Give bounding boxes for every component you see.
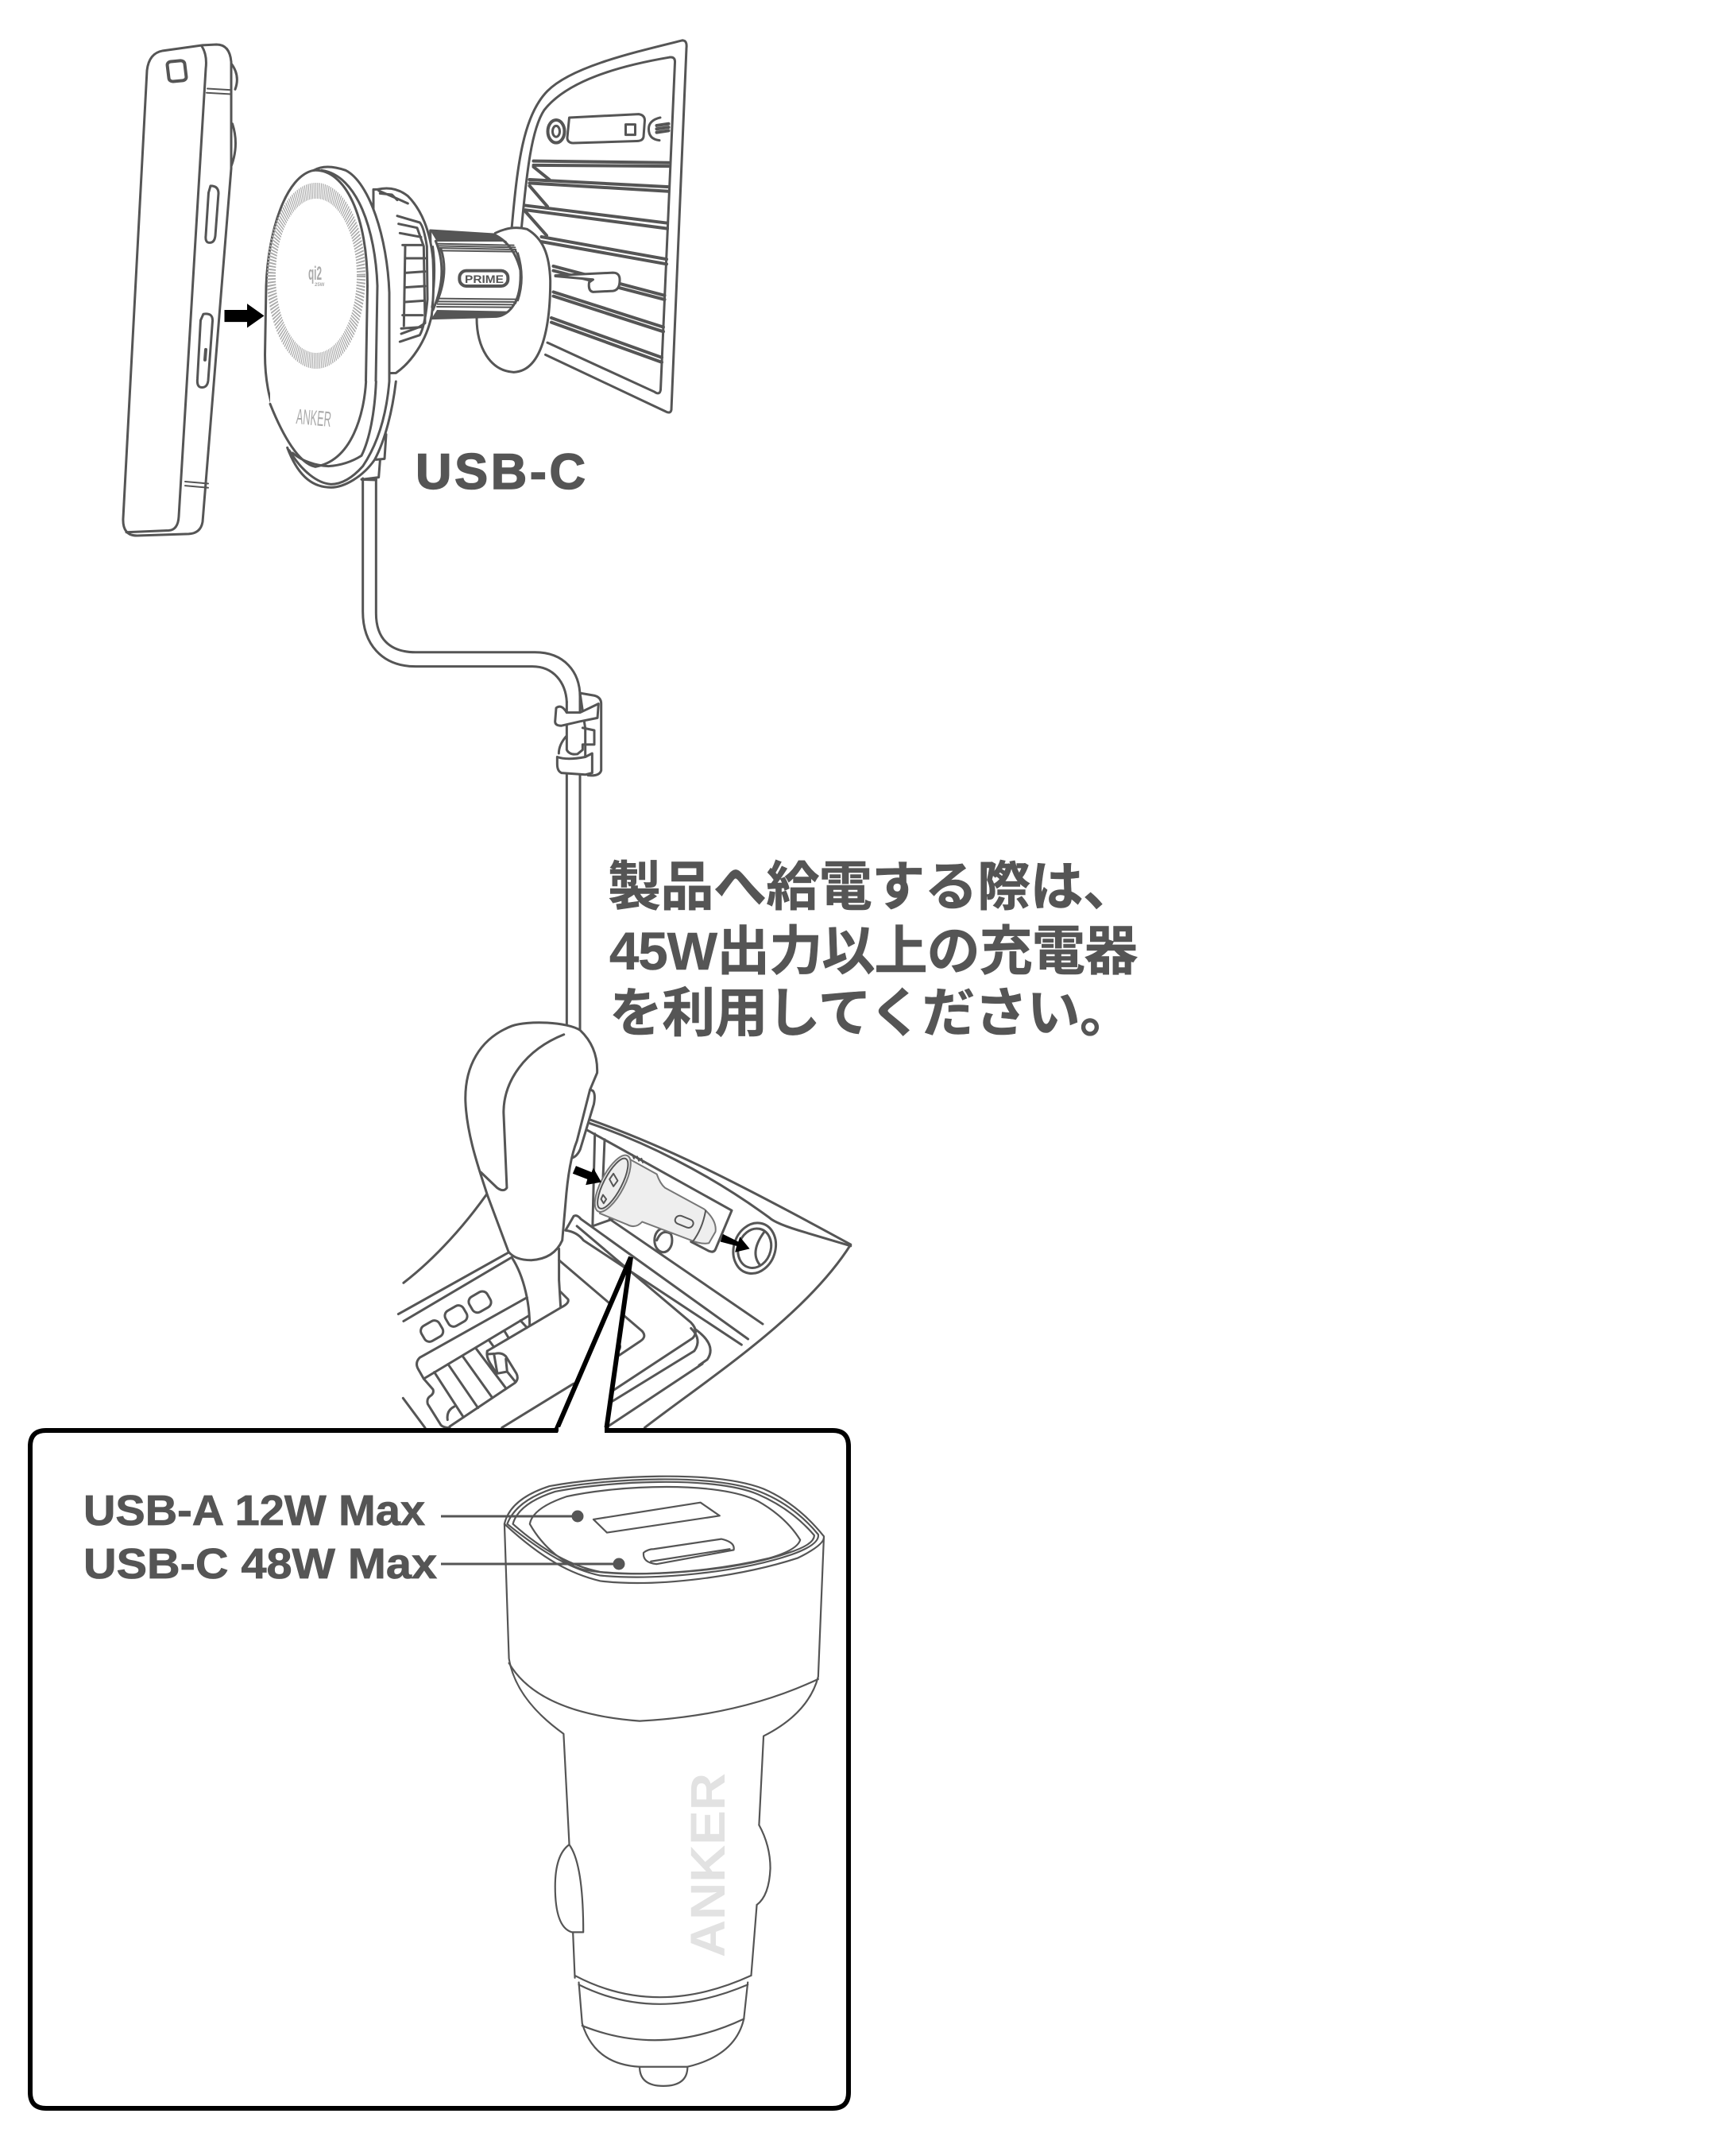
label: USB-C 48W Max: USB-C 48W Max bbox=[83, 1540, 437, 1588]
arrow: phone to charger bbox=[224, 304, 264, 328]
logo: PRIME badge text: PRIME bbox=[465, 273, 504, 285]
illustration: console control panel bbox=[403, 1289, 620, 1428]
illustration: charger base and neck bbox=[270, 381, 396, 487]
illustration: mount arm, clip and collar bbox=[373, 188, 551, 374]
caption: power requirement bbox=[608, 857, 1138, 1043]
illustration: car vent with clip bbox=[512, 41, 686, 412]
illustration: small car charger in socket bbox=[588, 1152, 716, 1244]
logo: qi2: 25W bbox=[315, 283, 325, 288]
caption: power requirement: 45W出力以上の充電器 bbox=[609, 922, 1138, 981]
logo: qi2 bbox=[308, 263, 325, 288]
illustration: large car charger bbox=[505, 1477, 824, 2086]
caption: power requirement: を利用してください。 bbox=[609, 984, 1133, 1043]
text: ANKER bbox=[296, 404, 332, 432]
arrow: into socket bbox=[721, 1234, 750, 1252]
label: USB-A 12W Max bbox=[83, 1487, 583, 1535]
pointer gap mask bbox=[559, 1427, 605, 1434]
panel: charger zoom callout bbox=[30, 1257, 849, 2108]
illustration: shift lever bbox=[466, 1023, 597, 1326]
illustration: magnetic wireless charger bbox=[265, 167, 389, 486]
illustration: car console lines bbox=[398, 1120, 851, 1427]
icon: charging ring bbox=[272, 191, 361, 361]
logo: qi2: qi2 bbox=[308, 263, 322, 284]
label: USB-C: USB-C bbox=[416, 444, 586, 500]
caption: power requirement: 製品へ給電する際は、 bbox=[608, 857, 1136, 917]
cable with cable clip bbox=[363, 478, 601, 1030]
label: USB-A 12W Max: USB-A 12W Max bbox=[83, 1487, 425, 1535]
label: USB-C 48W Max bbox=[83, 1540, 624, 1588]
illustration: phone bbox=[123, 45, 237, 536]
logo: ANKER on car charger: ANKER bbox=[681, 1773, 735, 1957]
arrow: charger connector bbox=[573, 1166, 601, 1185]
